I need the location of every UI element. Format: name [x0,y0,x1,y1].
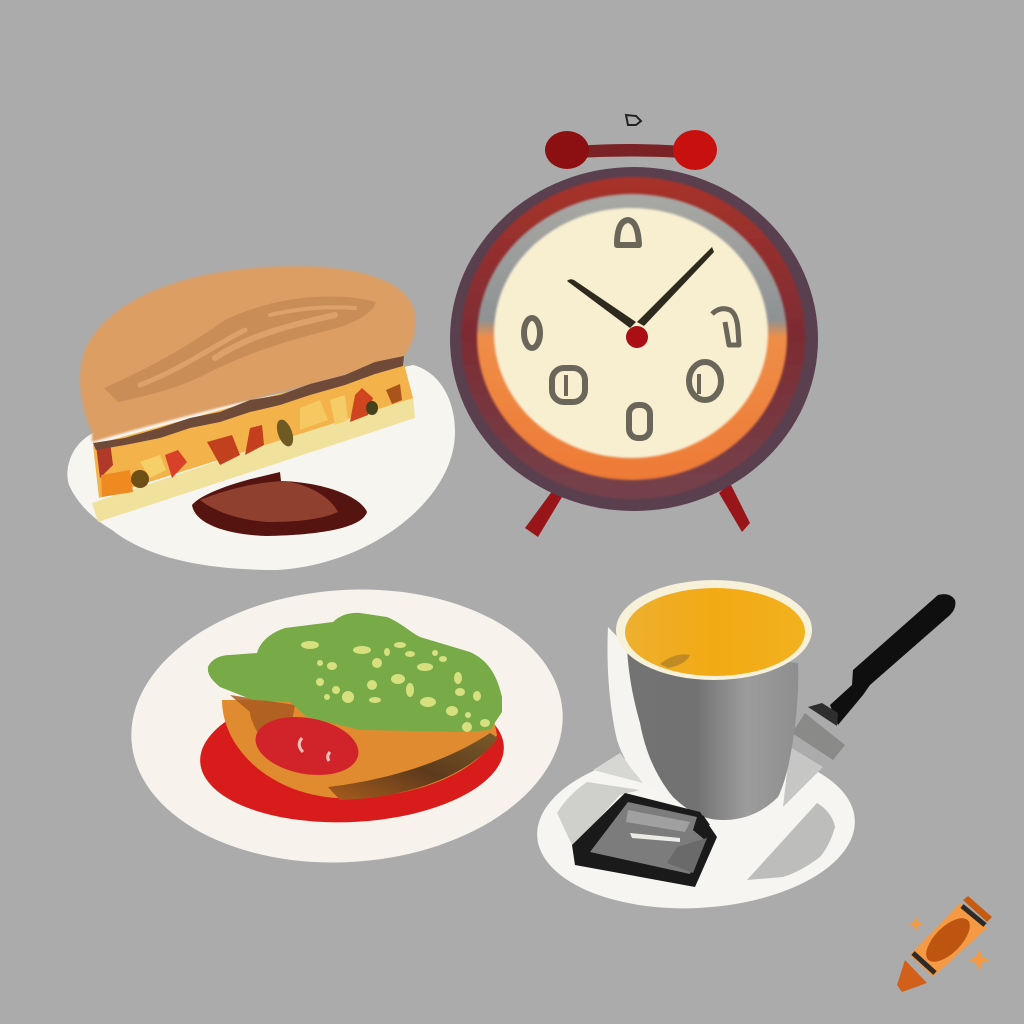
crayon body [910,903,987,977]
clock hands [567,247,714,348]
sparkles [908,916,990,971]
spatula [792,594,955,760]
cup [607,580,812,820]
crayon tip [897,960,927,992]
crayon cap [963,896,992,922]
icon: crayon logo [897,896,992,992]
sandwich plate [67,365,455,570]
sandwich filling [92,360,415,522]
clock numerals [524,220,739,438]
crayon bands [913,906,985,973]
icon: coffee cup on saucer [533,580,955,916]
crayon oval [919,911,977,969]
sandwich bun [80,266,415,450]
avocado spread [208,613,502,732]
clock body [450,167,818,511]
toast [222,695,498,800]
icon: plate with avocado toast [122,575,572,877]
saucer [533,740,859,916]
sausage [192,472,367,536]
phone on saucer [572,793,717,887]
cup handle [607,627,670,797]
red dish [197,678,507,830]
icon: alarm clock [450,115,818,537]
clock mark [626,115,641,125]
large plate [122,575,572,877]
icon: sandwich on plate [67,266,455,570]
tomato [251,709,363,783]
clock legs [525,483,750,537]
clock bells [545,130,717,170]
